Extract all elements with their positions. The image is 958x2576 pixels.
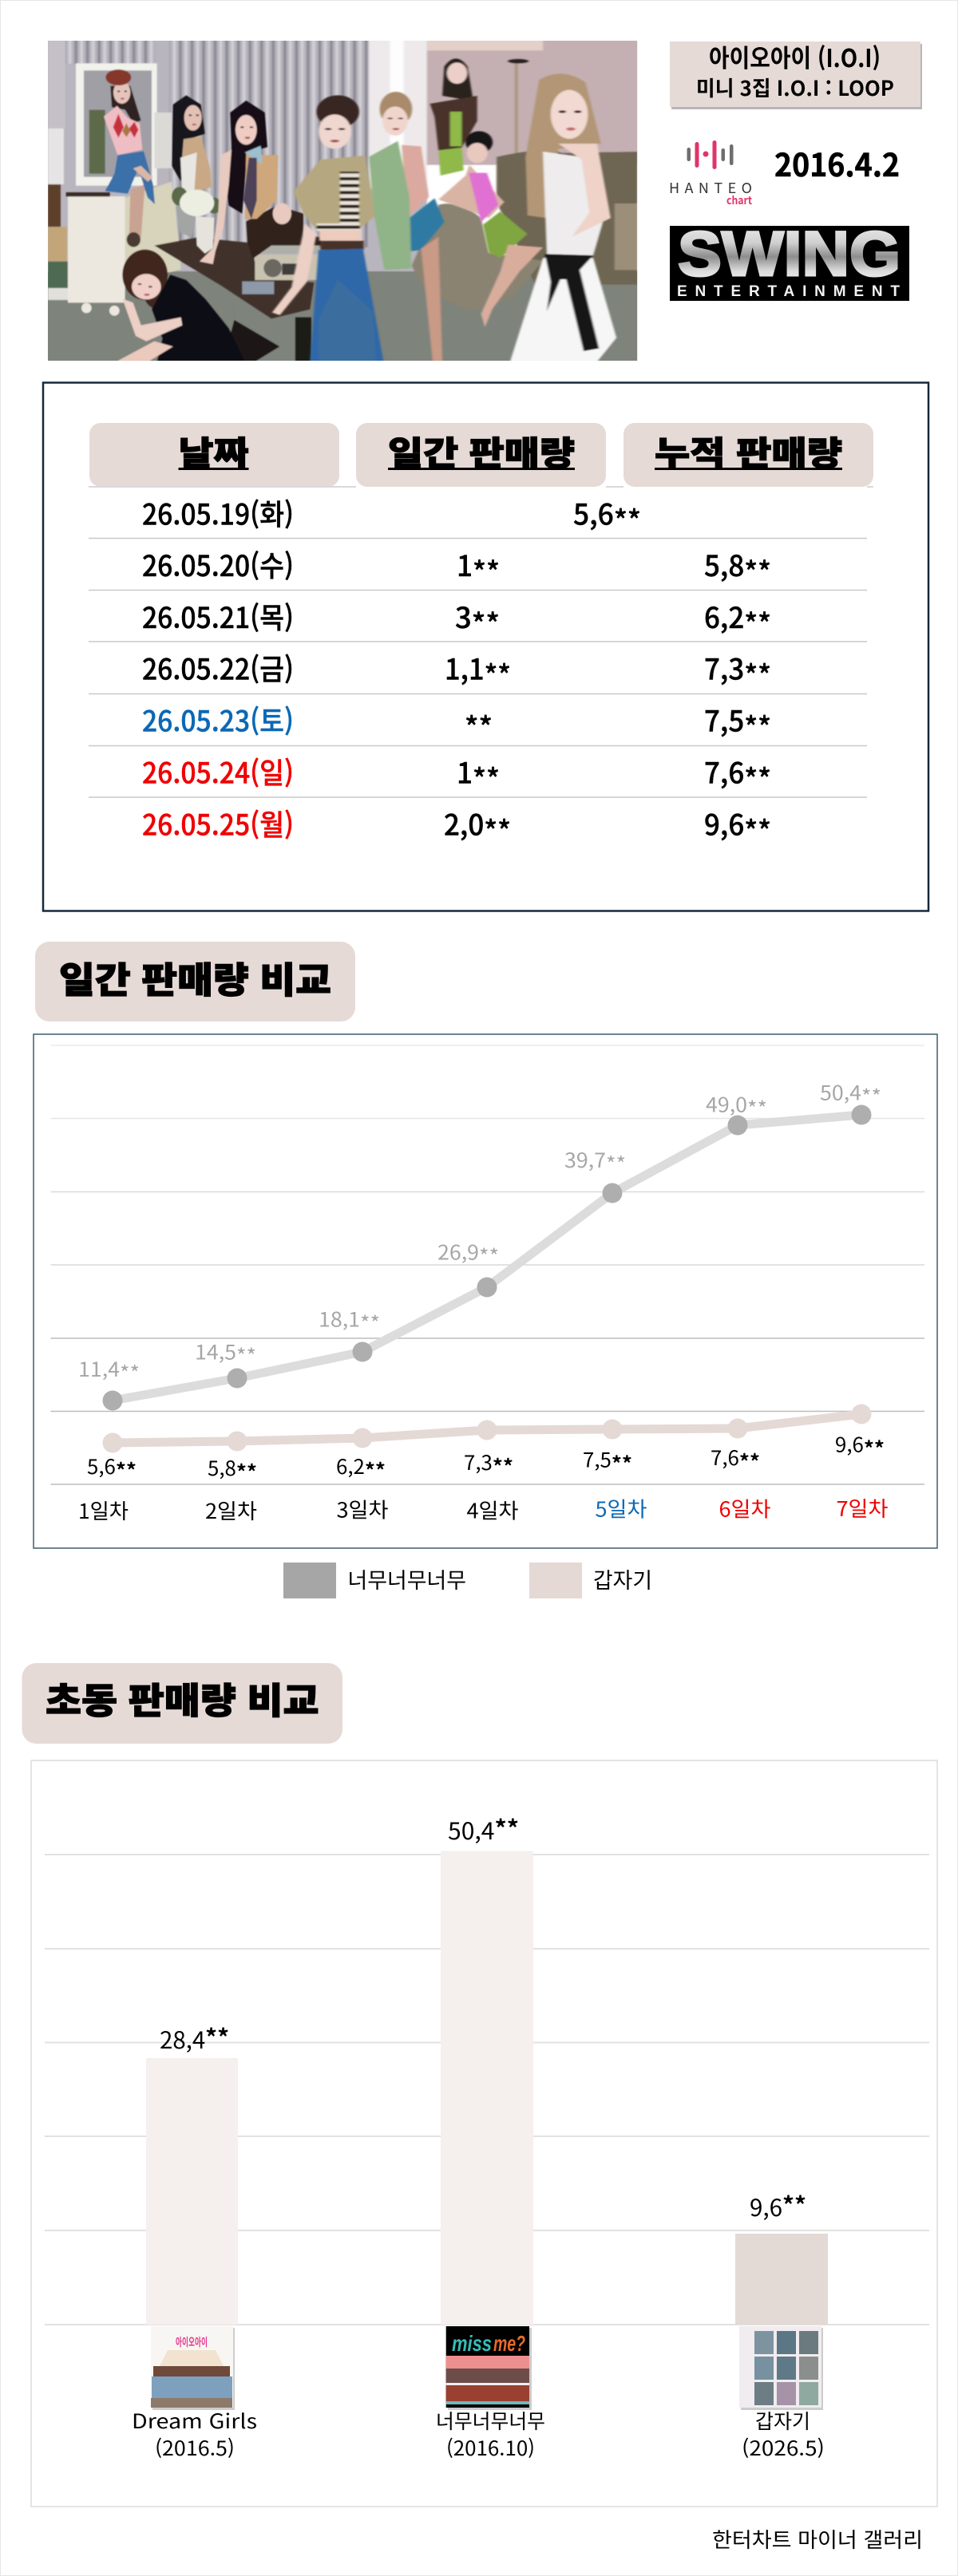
data labels: 너무너무너무: 50,4	[820, 1077, 859, 1106]
album label: Dream Girls	[132, 2406, 257, 2462]
data labels: 너무너무너무: **	[236, 1341, 256, 1369]
x axis labels: 6일차	[718, 1494, 771, 1523]
row: 26.05.19: 26.05.19(화)	[142, 492, 294, 533]
release date: 2016.4.2	[774, 140, 900, 186]
row: 26.05.20: 5,8	[704, 543, 746, 585]
legend	[283, 1563, 652, 1598]
icon: Hanteo chart logo: HANTEO	[669, 177, 752, 198]
bar: Dream Girls: 28,4	[160, 2022, 204, 2056]
bar: Dream Girls: **	[205, 2020, 229, 2053]
row: 26.05.19: **	[614, 498, 641, 539]
panel: sales table	[43, 383, 928, 911]
photo: group photo of I.O.I members in a living room	[40, 40, 643, 362]
row: 26.05.25: **	[744, 809, 771, 851]
data labels: 너무너무너무: **	[747, 1093, 767, 1122]
row: 26.05.22: 7,3	[704, 646, 746, 688]
row: 26.05.24: 26.05.24(일)	[142, 750, 294, 792]
row: 26.05.25: 9,6	[704, 803, 746, 844]
left edge props	[48, 41, 234, 362]
row: 26.05.21	[142, 595, 771, 643]
album label: 너무너무너무: 너무너무너무	[436, 2406, 545, 2435]
album label: 갑자기: 갑자기	[755, 2406, 810, 2435]
member: girl in green jacket	[369, 92, 445, 362]
data labels: 갑자기: **	[236, 1457, 257, 1486]
album label: 갑자기: (2026.5)	[742, 2433, 825, 2462]
x axis labels	[78, 1493, 889, 1525]
data labels: 갑자기: **	[612, 1449, 632, 1478]
x axis labels: 4일차	[466, 1495, 519, 1524]
data labels: 너무너무너무: **	[861, 1082, 881, 1111]
member: girl in brown leather jacket	[430, 58, 477, 176]
data labels: 갑자기: **	[493, 1452, 513, 1480]
icon: Hanteo chart logo	[669, 140, 752, 208]
album label: Dream Girls: Dream Girls	[132, 2406, 257, 2435]
row: 26.05.19: 5,6	[573, 492, 615, 533]
panel: daily sales line chart	[34, 1034, 937, 1548]
row: 26.05.24: **	[744, 757, 771, 798]
data labels: 너무너무너무: **	[120, 1358, 140, 1387]
row: 26.05.20: 26.05.20(수)	[142, 543, 294, 585]
table and radio	[154, 238, 319, 362]
row: 26.05.21: **	[472, 602, 500, 643]
x axis labels: 1일차	[78, 1495, 129, 1525]
series: 갑자기 line	[102, 1405, 872, 1452]
data labels: 너무너무너무: 11,4	[78, 1354, 117, 1383]
room background	[40, 40, 643, 362]
bar: 갑자기: 9,6	[750, 2190, 782, 2223]
heading: daily sales comparison: 일간 판매량 비교	[59, 951, 331, 1003]
data labels: 갑자기: 7,3	[464, 1448, 492, 1476]
bar: 너무너무너무	[441, 1811, 533, 2325]
album cover: Dream Girls	[151, 2326, 235, 2410]
data labels: 갑자기: **	[365, 1456, 386, 1484]
table header: cumulative sales	[623, 423, 873, 487]
heading: first-week sales comparison	[22, 1663, 342, 1744]
bar: 너무너무너무: **	[494, 1811, 519, 1844]
icon: Swing Entertainment logo: ENTERTAINMENT	[677, 283, 900, 300]
right side of the room with four members	[272, 58, 616, 362]
data labels: 너무너무너무: 14,5	[195, 1337, 234, 1366]
data labels: 너무너무너무: 39,7	[564, 1145, 604, 1174]
member: centre girl in denim skirt	[272, 95, 383, 362]
album label: 너무너무너무	[436, 2406, 545, 2462]
bar: Dream Girls	[146, 2020, 238, 2325]
row: 26.05.24: **	[473, 757, 500, 798]
x axis labels: 2일차	[205, 1495, 257, 1525]
x axis labels: 7일차	[837, 1493, 889, 1523]
data labels: 너무너무너무: **	[479, 1242, 499, 1270]
album cover: 갑자기	[739, 2326, 823, 2410]
row: 26.05.21: **	[744, 602, 771, 643]
data labels: 갑자기: **	[116, 1456, 137, 1484]
row: 26.05.20: 1	[457, 543, 473, 585]
data labels: 갑자기: 6,2	[336, 1452, 364, 1480]
data labels: 너무너무너무: 18,1	[319, 1304, 358, 1333]
data labels: 갑자기: 5,6	[87, 1452, 115, 1480]
table header: date	[89, 423, 339, 487]
left side of the room with four members	[48, 41, 322, 362]
artist name: 아이오아이 (I.O.I)	[709, 38, 881, 74]
data labels: 갑자기: 5,8	[208, 1453, 236, 1482]
row: 26.05.22: **	[485, 653, 511, 694]
table header: cumulative sales: 누적 판매량	[655, 427, 842, 476]
table header: daily sales: 일간 판매량	[388, 427, 575, 476]
data labels: 갑자기: 9,6	[835, 1430, 863, 1459]
mirror	[76, 63, 172, 186]
icon: Hanteo chart logo: chart	[726, 192, 752, 208]
icon: Swing Entertainment logo: SWING	[678, 218, 901, 289]
member: seated girl at bottom left	[117, 250, 245, 362]
member: girl with tie	[200, 101, 322, 264]
data labels: 갑자기: **	[739, 1447, 760, 1476]
row: 26.05.25: 2,0	[444, 803, 485, 844]
legend: 갑자기	[593, 1563, 652, 1594]
data labels: 너무너무너무: 49,0	[706, 1090, 745, 1119]
bar: 갑자기: **	[782, 2187, 806, 2221]
data labels: 너무너무너무	[78, 1077, 881, 1387]
row: 26.05.23	[142, 699, 771, 747]
member: mirror girl	[104, 69, 155, 247]
table header: date: 날짜	[179, 427, 249, 476]
data labels: 갑자기: **	[864, 1433, 885, 1462]
data labels: 너무너무너무: 26,9	[437, 1237, 477, 1266]
x axis labels: 3일차	[337, 1494, 389, 1524]
heading: first-week sales comparison: 초동 판매량 비교	[46, 1672, 319, 1724]
row: 26.05.20	[142, 543, 771, 591]
heading: daily sales comparison	[35, 942, 355, 1021]
member: sofa girl in pink halter	[438, 131, 543, 327]
row: 26.05.22: **	[744, 653, 771, 694]
album cover: 너무너무너무 (miss me?)	[446, 2326, 532, 2410]
album name: 미니 3집 I.O.I : LOOP	[696, 73, 894, 102]
data labels: 갑자기: 7,6	[711, 1443, 738, 1472]
album label: 너무너무너무: (2016.10)	[446, 2433, 535, 2462]
album cover: Dream Girls: 아이오아이	[176, 2334, 208, 2350]
row: 26.05.22	[142, 646, 771, 694]
table header: daily sales	[356, 423, 606, 487]
row: 26.05.20: **	[473, 550, 500, 591]
x axis labels: 5일차	[596, 1494, 647, 1523]
data labels: 갑자기	[87, 1430, 885, 1486]
row: 26.05.25: **	[484, 809, 511, 851]
album label: Dream Girls: (2016.5)	[155, 2433, 235, 2462]
bar: 갑자기	[735, 2187, 828, 2325]
row: 26.05.24: 1	[457, 750, 473, 792]
row: 26.05.21: 6,2	[704, 595, 746, 637]
row: 26.05.23: 26.05.23(토)	[142, 699, 294, 741]
member: blonde girl in white dress	[510, 73, 616, 362]
data labels: 너무너무너무: **	[606, 1149, 626, 1178]
row: 26.05.24	[142, 750, 771, 798]
row: 26.05.25: 26.05.25(월)	[142, 803, 294, 844]
vase and flowers	[172, 187, 221, 254]
row: 26.05.19	[142, 492, 641, 539]
album title card	[670, 38, 922, 109]
row: 26.05.23: 7,5	[704, 699, 746, 741]
legend: 너무너무너무	[348, 1563, 466, 1594]
row: 26.05.22: 26.05.22(금)	[142, 646, 294, 688]
data labels: 너무너무너무: **	[360, 1309, 380, 1337]
row: 26.05.20: **	[744, 550, 771, 591]
row: 26.05.25	[142, 803, 771, 851]
album label: 갑자기	[742, 2406, 825, 2462]
row: 26.05.21: 26.05.21(목)	[142, 595, 294, 637]
footer credit: 한터차트 마이너 갤러리	[712, 2524, 923, 2554]
member: long dark hair	[172, 95, 212, 238]
bar: 너무너무너무: 50,4	[448, 1813, 493, 1847]
row: 26.05.23: **	[744, 705, 771, 747]
row: 26.05.24: 7,6	[704, 750, 746, 792]
album cover: 너무너무너무 (miss me?): miss	[452, 2331, 492, 2356]
white dresser	[66, 182, 181, 316]
row: 26.05.23: **	[465, 705, 493, 747]
panel: first-week sales bar chart	[31, 1760, 937, 2507]
data labels: 갑자기: 7,5	[583, 1444, 611, 1473]
album cover: 너무너무너무 (miss me?): me?	[493, 2331, 525, 2356]
row: 26.05.21: 3	[455, 595, 472, 637]
row: 26.05.22: 1,1	[445, 646, 486, 688]
series: 너무너무너무 line	[102, 1104, 872, 1411]
